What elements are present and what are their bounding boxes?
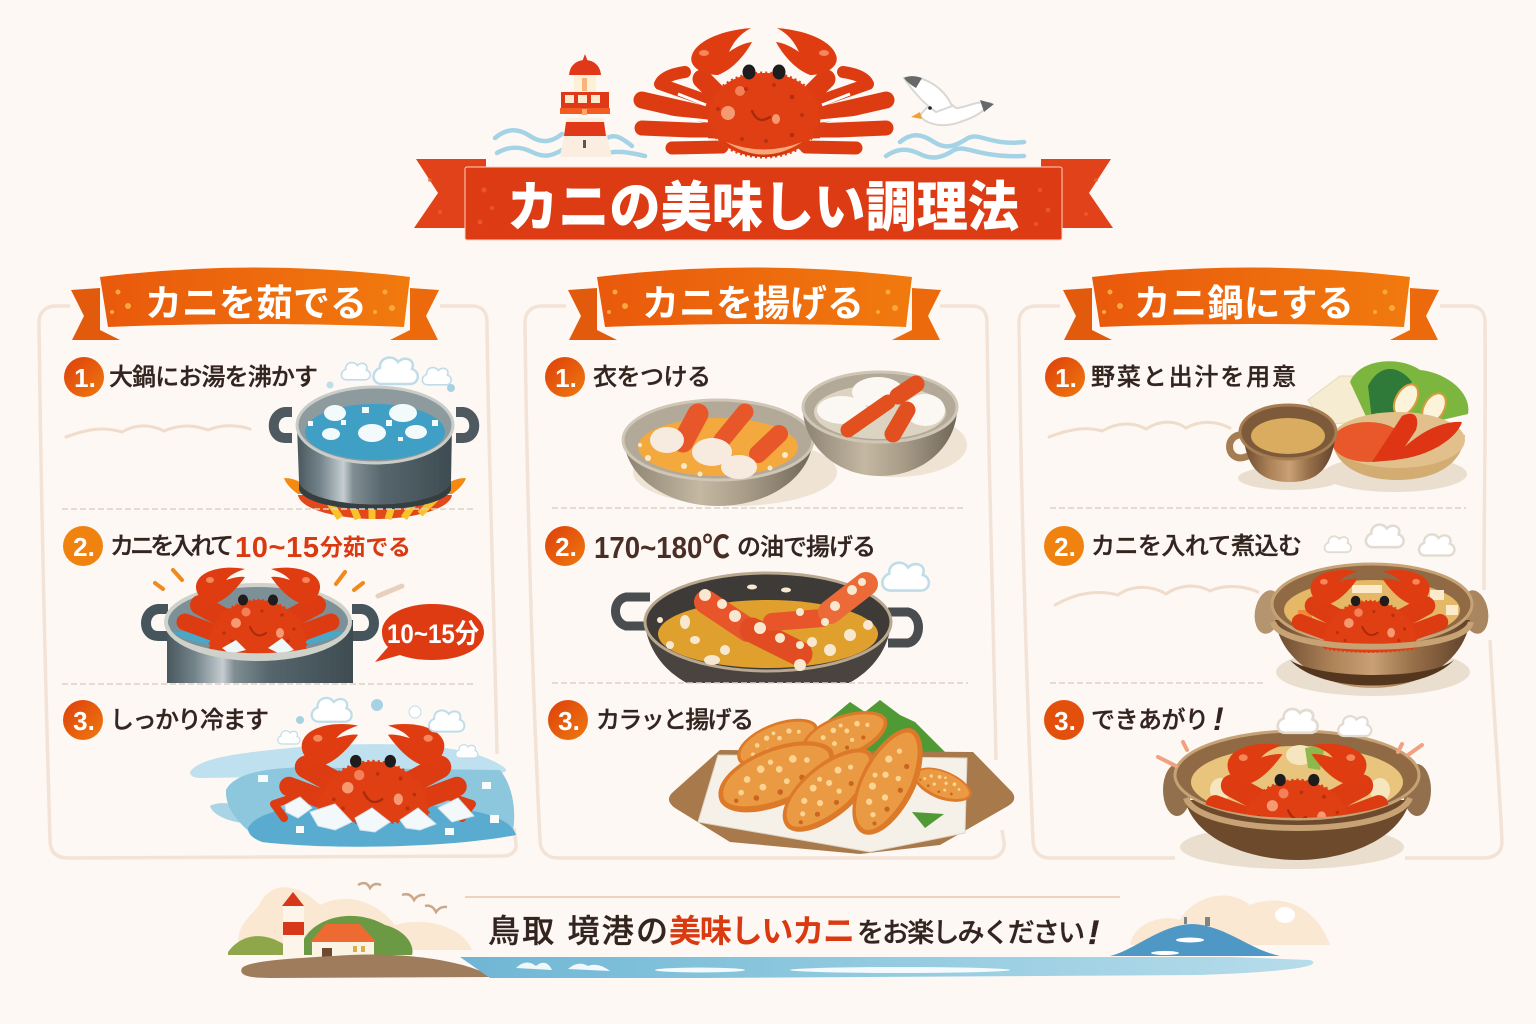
icon: steam <box>1324 525 1454 556</box>
divider <box>1050 507 1466 509</box>
icon: wooden board <box>669 750 1014 854</box>
step 3 <box>1044 700 1431 869</box>
step 3: 3. <box>73 706 95 736</box>
panel: boil <box>39 268 516 858</box>
step 2: カニを入れて煮込む <box>1091 533 1302 560</box>
step 1: 1. <box>1055 363 1077 393</box>
step 1 <box>545 357 967 506</box>
section heading ribbon <box>568 268 941 340</box>
footer left coast scene <box>228 883 492 978</box>
step 2: 170~180℃ <box>594 530 730 565</box>
step 2: 2. <box>555 532 577 562</box>
footer right island <box>1110 896 1330 956</box>
icon: greens <box>826 700 945 770</box>
step 2 <box>545 526 929 700</box>
step 1: 野菜と出汁を用意 <box>1091 364 1296 391</box>
tagline: 鳥取 境港の <box>488 913 668 949</box>
icon: frying pan <box>616 573 918 700</box>
icon: broth bowl <box>1230 405 1342 490</box>
step 3: できあがり <box>1091 707 1209 734</box>
icon: finished hotpot <box>1163 731 1431 869</box>
hero illustration: crab, lighthouse and seagull <box>495 28 1024 157</box>
icon: steam bubbles <box>278 698 478 758</box>
section heading ribbon <box>71 268 439 340</box>
icon: sparkle marks <box>1158 742 1422 766</box>
section heading ribbon: カニを茹でる <box>145 283 367 324</box>
icon: fried crab pieces <box>710 706 976 845</box>
step 3 <box>548 700 1014 854</box>
step 1 <box>64 357 474 519</box>
title banner <box>414 159 1113 240</box>
step 2 <box>63 526 484 683</box>
step 3: しっかり冷ます <box>110 707 269 734</box>
divider <box>1050 682 1266 684</box>
tagline: をお楽しみください <box>857 918 1085 948</box>
section heading ribbon: カニを揚げる <box>642 283 864 324</box>
step 3: 3. <box>558 706 580 736</box>
icon: birds <box>358 883 447 912</box>
icon: waves left <box>495 130 645 156</box>
divider <box>62 683 474 685</box>
icon: crumb bowl <box>803 372 967 477</box>
step 1: 衣をつける <box>593 364 711 391</box>
section heading ribbon <box>1063 268 1439 340</box>
callout: 10~15分: 10~15分 <box>387 619 479 649</box>
icon: steam <box>1278 709 1371 736</box>
step 2 <box>1044 525 1492 696</box>
divider <box>552 682 968 684</box>
icon: boiling pot <box>274 387 474 510</box>
icon: crab on plate <box>1323 412 1467 492</box>
icon: water pool <box>190 744 516 847</box>
footer <box>228 883 1330 978</box>
step 2: カニを入れて <box>110 533 234 560</box>
step 2: 2. <box>73 532 95 562</box>
step 3: カラッと揚げる <box>596 707 754 734</box>
icon: crab <box>642 28 886 157</box>
step 3: ! <box>1213 701 1224 737</box>
step 1: 1. <box>555 363 577 393</box>
step 1: 大鍋にお湯を沸かす <box>109 364 318 391</box>
tagline: 美味しいカニ <box>669 913 855 949</box>
step 2: 分茹でる <box>320 534 411 560</box>
icon: rocks <box>241 954 492 978</box>
icon: pot with crab <box>146 568 374 683</box>
section heading ribbon: カニ鍋にする <box>1134 283 1354 324</box>
banner body <box>465 167 1062 240</box>
panel frame <box>525 306 1004 858</box>
tagline <box>488 913 1099 952</box>
divider <box>62 508 474 510</box>
icon: steam <box>326 357 455 392</box>
step 3 <box>63 698 516 847</box>
icon: iced crab <box>258 724 499 835</box>
step 1: 1. <box>74 363 96 393</box>
icon: stove flame <box>284 478 466 519</box>
icon: seagull <box>904 76 994 125</box>
icon: paper <box>698 755 967 852</box>
panel: deep fry <box>525 268 1014 858</box>
icon: lighthouse <box>282 892 304 960</box>
icon: waves right <box>886 135 1024 157</box>
tagline: ! <box>1088 914 1099 952</box>
icon: clay pot with crab <box>1251 564 1492 696</box>
step 2: の油で揚げる <box>737 534 876 561</box>
panel: crab hotpot <box>1019 268 1502 869</box>
step 1 <box>1045 357 1468 492</box>
icon: batter bowl <box>623 400 837 506</box>
callout: 10~15分 <box>375 604 484 662</box>
ribbon tails <box>414 159 1113 228</box>
icon: vegetables <box>1308 361 1468 427</box>
icon: sparkle marks <box>155 570 363 590</box>
panel frame <box>1019 306 1502 858</box>
step 2: 10~15 <box>235 532 319 564</box>
sea band <box>460 957 1313 978</box>
icon: lighthouse <box>560 54 612 157</box>
title text: カニの美味しい調理法 <box>507 178 1019 238</box>
step 3: 3. <box>1054 706 1076 736</box>
divider <box>552 507 966 509</box>
panel frame <box>39 306 516 858</box>
step 2: 2. <box>1054 532 1076 562</box>
icon: steam <box>882 563 929 591</box>
icon: house <box>310 924 376 962</box>
